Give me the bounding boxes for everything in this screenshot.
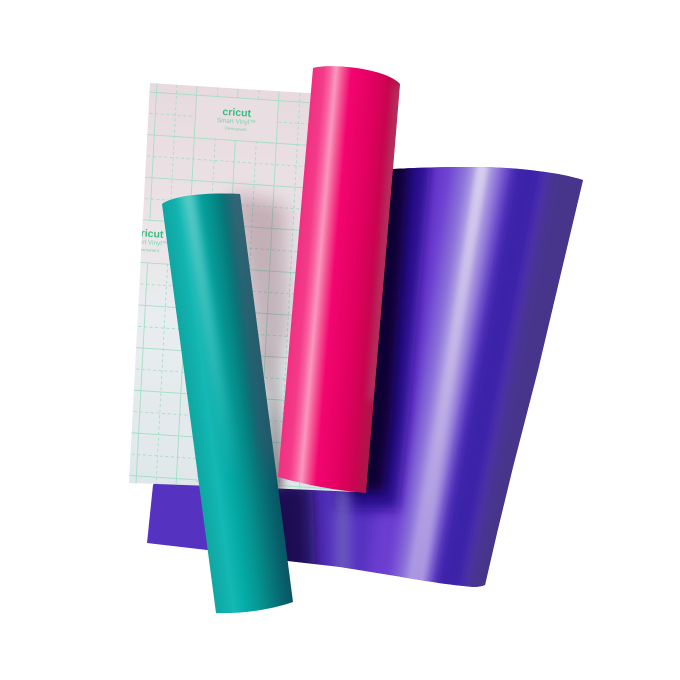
illustration: vinyl rolls and sheets [129, 66, 583, 614]
pink vinyl roll [278, 66, 400, 493]
label: second cricut logo: Smart Vinyl™ [129, 238, 168, 248]
label: second cricut logo: Permanent [137, 247, 160, 253]
label: top cricut logo [217, 108, 256, 132]
cricut backing sheet with grid [129, 83, 356, 492]
label: second cricut logo [141, 229, 168, 252]
label: second cricut logo: cricut [135, 227, 164, 241]
grid lines [129, 84, 341, 492]
shadow beside teal roll near pink roll [260, 340, 283, 490]
teal vinyl roll [162, 194, 293, 614]
label: top cricut logo: Smart Vinyl™ [217, 117, 256, 127]
roll shadow on sheet [232, 192, 290, 400]
purple vinyl sheet [147, 167, 583, 587]
label: top cricut logo: Permanent [225, 126, 248, 132]
label: top cricut logo: cricut [222, 106, 252, 120]
